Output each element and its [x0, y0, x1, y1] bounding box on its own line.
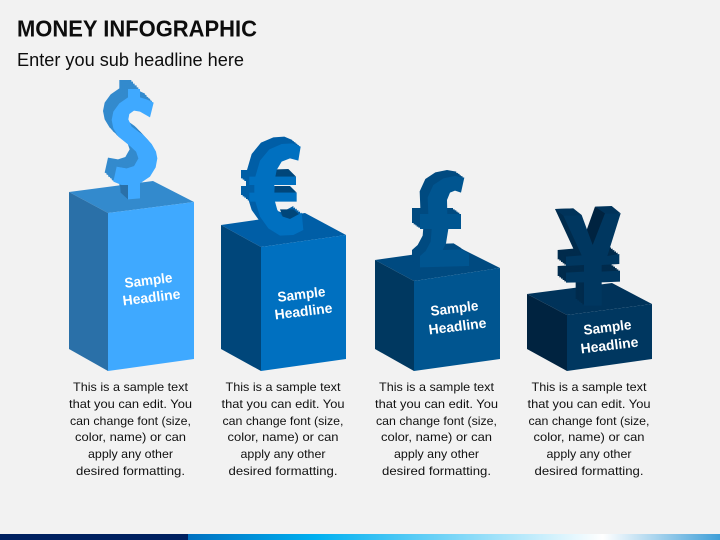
box 2: medium blue [221, 213, 346, 371]
text: column 4: apply any other [546, 447, 632, 461]
text: column 1 [69, 380, 192, 478]
text: column 3: color, name) or can [381, 430, 492, 444]
box 2 label: Headline [274, 300, 333, 323]
box 4 label [580, 316, 639, 357]
text: column 3: apply any other [394, 447, 479, 461]
box 4 label: Headline [580, 334, 639, 357]
box 3 label [428, 297, 487, 338]
text: column 3: desired formatting. [382, 464, 491, 478]
icon: euro [241, 137, 303, 236]
text: column 1: that you can edit. You [69, 397, 192, 411]
box 4 label: Sample [583, 316, 632, 338]
icon: pound [412, 170, 469, 267]
box 2 label: Sample [277, 283, 326, 305]
text: column 1: color, name) or can [75, 430, 186, 444]
text: column 4: that you can edit. You [528, 397, 650, 411]
box 3: dark blue [375, 248, 500, 371]
box 4: navy [527, 283, 652, 371]
yen front face [563, 213, 621, 306]
text: column 2: This is a sample text [226, 380, 341, 394]
text: column 1: can change font (size, [70, 414, 191, 428]
euro front face [249, 143, 303, 236]
box 1 label: Sample [124, 269, 173, 291]
text: column 2: that you can edit. You [222, 397, 344, 411]
footer bar [0, 534, 720, 540]
dollar front face [112, 89, 157, 199]
pound front face [420, 176, 469, 267]
text: column 3: This is a sample text [379, 380, 495, 394]
box 1: light blue [69, 181, 194, 371]
icon: dollar [103, 80, 157, 199]
text: column 2: color, name) or can [228, 430, 338, 444]
box 1 label [122, 269, 181, 309]
text: column 3 [375, 380, 498, 478]
text: column 1: apply any other [88, 447, 173, 461]
text: column 2: can change font (size, [222, 414, 344, 428]
box 3 label: Sample [430, 297, 479, 319]
icon: yen [555, 206, 621, 306]
text: column 2: desired formatting. [228, 464, 338, 478]
text: column 1: desired formatting. [76, 464, 185, 478]
subtitle: Enter you sub headline here [17, 50, 244, 70]
title: MONEY INFOGRAPHIC [17, 16, 257, 42]
yen inner shadow [587, 207, 605, 245]
text: column 1: This is a sample text [73, 380, 189, 394]
text: column 4: can change font (size, [528, 414, 650, 428]
box 3 label: Headline [428, 315, 487, 338]
text: column 4: desired formatting. [534, 464, 644, 478]
text: column 2 [222, 380, 344, 478]
box 1 label: Headline [122, 286, 181, 309]
text: column 4 [528, 380, 650, 478]
text: column 2: apply any other [240, 447, 326, 461]
dollar inner shadow [132, 127, 143, 135]
text: column 3: that you can edit. You [375, 397, 498, 411]
box 2 label [274, 283, 333, 323]
text: column 4: This is a sample text [532, 380, 647, 394]
text: column 4: color, name) or can [534, 430, 644, 444]
text: column 3: can change font (size, [376, 414, 497, 428]
euro inner shadow [275, 169, 296, 177]
